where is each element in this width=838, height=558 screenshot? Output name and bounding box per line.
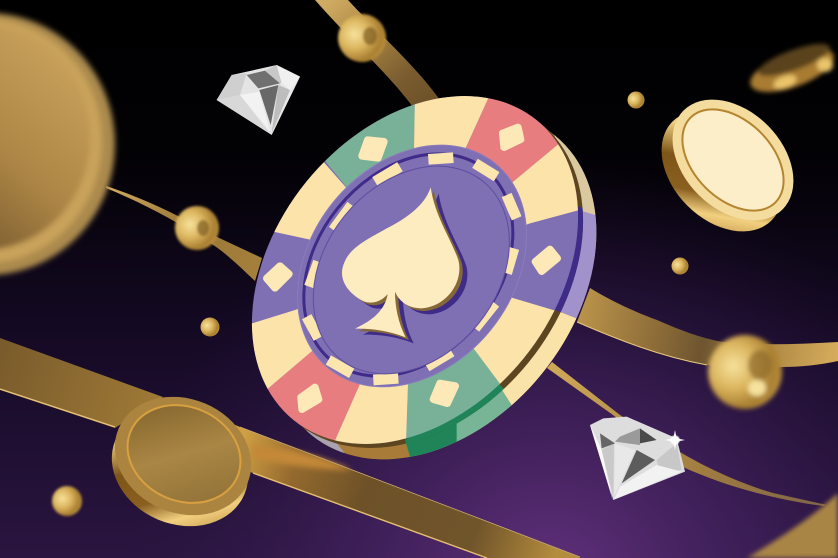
gold ball: top: [338, 14, 386, 62]
gold ball: left: [175, 206, 219, 250]
ribbon: bottom right corner: [747, 493, 838, 558]
segment: cream upper left: [274, 162, 346, 240]
segment: cream lower left: [252, 309, 312, 389]
segment: green bottom: [406, 348, 500, 438]
segment: cream upper right: [512, 144, 578, 225]
blurred coin: top right: [745, 38, 838, 101]
chip diamonds: [267, 127, 557, 409]
diamond: top: [217, 65, 300, 135]
blurred coin: far left: [0, 13, 115, 275]
diamond sparkle: [665, 430, 685, 450]
spade: [342, 187, 467, 343]
chip side rim: [304, 130, 596, 460]
gold ball: small right: [672, 258, 688, 274]
segment: cream bottom: [335, 384, 408, 444]
chip face: [252, 96, 578, 444]
poker chip: [252, 96, 596, 460]
segment: cream lower right: [474, 298, 554, 385]
dark inner band: [261, 113, 556, 417]
gold ball: blurred bottom left: [52, 486, 82, 516]
ribbon: top: [315, 0, 440, 107]
ribbon: bottom wide: [0, 338, 580, 558]
gold ball: small top right: [628, 92, 644, 108]
segment: red bottom: [268, 351, 360, 440]
ribbon: lower right thin: [547, 362, 827, 506]
gold ball: small left: [200, 318, 220, 336]
diamond: bottom: [590, 417, 685, 500]
gold coin: right: [638, 76, 817, 255]
ribbon: left thin: [106, 186, 262, 281]
segment: red top: [466, 98, 558, 182]
segment: cream top: [414, 96, 488, 148]
ring dashes: [307, 158, 517, 380]
ribbon: right: [577, 288, 838, 368]
gold coin: bottom left: [93, 376, 270, 547]
chip dark edge line: [298, 122, 584, 448]
segment: green top: [325, 104, 415, 187]
ring around centre: [250, 100, 574, 432]
centre disc: [273, 127, 550, 413]
gold ball: blurred right: [708, 335, 782, 409]
